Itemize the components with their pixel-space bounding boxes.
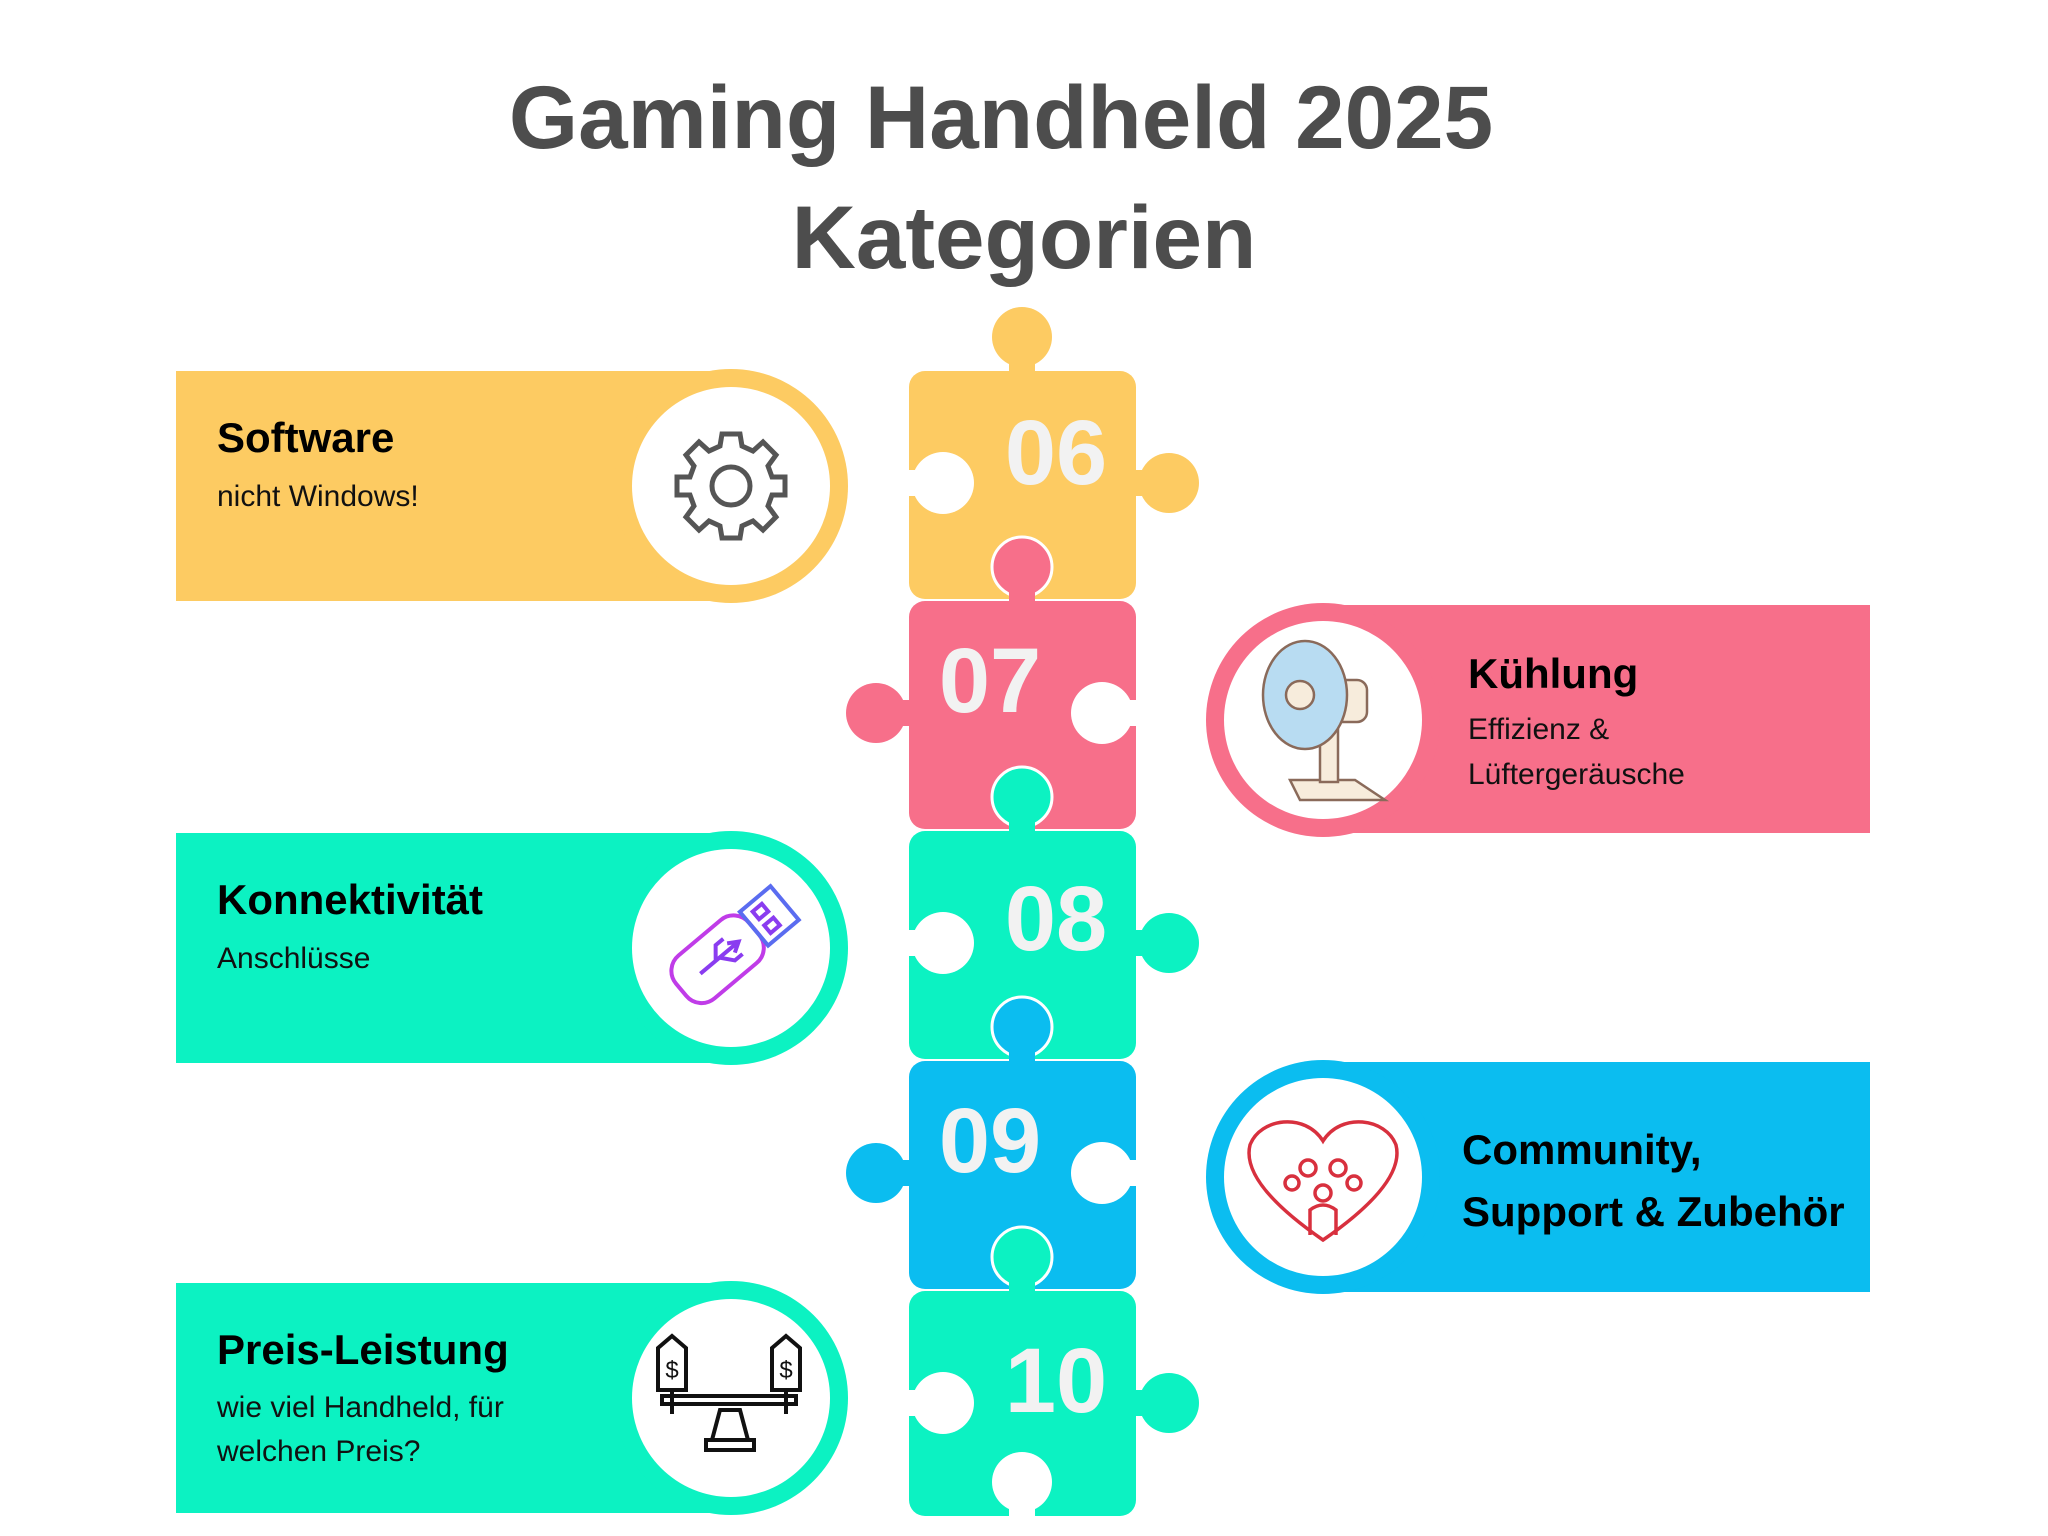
panel: konnektivitaet bbox=[176, 831, 848, 1065]
text: kuehlung sub: Lüftergeräusche bbox=[1468, 758, 1685, 791]
icon: scale: $ bbox=[665, 1357, 679, 1384]
heading: community: Support & Zubehör bbox=[1462, 1188, 1845, 1235]
puzzle: 10 bbox=[905, 1227, 1199, 1520]
heading: kuehlung: Kühlung bbox=[1468, 650, 1638, 697]
text: software sub: nicht Windows! bbox=[217, 480, 419, 513]
title: Gaming Handheld 2025 bbox=[509, 67, 1493, 167]
heading: software: Software bbox=[217, 414, 394, 461]
puzzle: 08 bbox=[905, 767, 1199, 1059]
text: anschluesse: Anschlüsse bbox=[217, 942, 370, 975]
heading: konnektivitaet: Konnektivität bbox=[217, 876, 483, 923]
puzzle: 08: 08 bbox=[1005, 868, 1107, 970]
heading: preis-leistung: Preis-Leistung bbox=[217, 1326, 509, 1373]
text: preis sub: wie viel Handheld, für bbox=[216, 1391, 504, 1424]
puzzle: 09: 09 bbox=[939, 1090, 1041, 1192]
panel: community bbox=[1206, 1060, 1870, 1294]
icon: heart people bbox=[1249, 1122, 1397, 1240]
panel: kuehlung bbox=[1206, 603, 1870, 837]
puzzle: 06: 06 bbox=[1005, 402, 1107, 504]
heading: community: Community, bbox=[1462, 1126, 1702, 1173]
puzzle: 07 bbox=[846, 537, 1140, 829]
title bbox=[509, 67, 1493, 287]
text: kuehlung sub: Effizienz & bbox=[1468, 713, 1609, 746]
puzzle: 10: 10 bbox=[1005, 1330, 1107, 1432]
title: Kategorien bbox=[792, 187, 1256, 287]
text: preis sub: welchen Preis? bbox=[216, 1435, 420, 1468]
icon: fan bbox=[1263, 641, 1385, 800]
puzzle: 09 bbox=[846, 997, 1140, 1289]
icon: scale: $ bbox=[779, 1357, 793, 1384]
icon: gear bbox=[677, 434, 785, 538]
puzzle: 06 bbox=[905, 307, 1199, 599]
panel: software bbox=[176, 369, 848, 603]
icon: usb stick bbox=[663, 882, 803, 1011]
puzzle: 07: 07 bbox=[939, 630, 1041, 732]
puzzle column bbox=[846, 307, 1199, 1520]
icon: scale bbox=[658, 1336, 800, 1450]
panel: preis-leistung bbox=[176, 1281, 848, 1515]
